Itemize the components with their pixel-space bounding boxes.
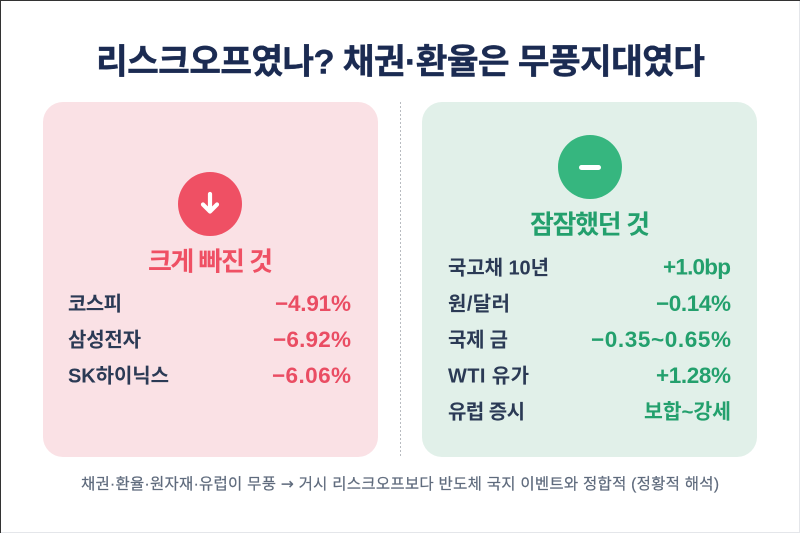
- row: European stocks: 유럽 증시: [448, 400, 525, 424]
- row: 10-year treasury: 국고채 10년: [448, 256, 549, 280]
- row: won/dollar: 원/달러: [448, 292, 510, 316]
- row: WTI: [448, 363, 731, 388]
- row: WTI: +1.28%: [656, 363, 731, 388]
- row: SK hynix: −6.06%: [272, 363, 351, 388]
- row: 10-year treasury: +1.0bp: [663, 254, 731, 280]
- row: gold: −0.35~0.65%: [591, 327, 731, 352]
- row: SK hynix: SK하이닉스: [68, 364, 169, 388]
- row: Samsung Electronics: 삼성전자: [68, 328, 141, 352]
- row: SK hynix: [68, 363, 351, 388]
- heading: stayed calm: 잠잠했던 것: [530, 210, 650, 240]
- row: won/dollar: −0.14%: [656, 291, 731, 316]
- icon: minus: [558, 135, 622, 199]
- footer note: 채권·환율·원자재·유럽이 무풍 → 거시 리스크오프보다 반도체 국지 이벤트와 정합적 (정황적 해석): [81, 475, 719, 493]
- panel: stayed calm: [422, 102, 757, 457]
- icon: down arrow: [178, 172, 242, 236]
- heading: large declines: 크게 빠진 것: [148, 246, 273, 276]
- row: Samsung Electronics: −6.92%: [273, 327, 351, 352]
- row: European stocks: 보합~강세: [644, 400, 731, 424]
- row: 10-year treasury: [448, 254, 731, 280]
- row: Samsung Electronics: [68, 327, 351, 352]
- row: KOSPI: [68, 291, 351, 316]
- row: KOSPI: 코스피: [68, 292, 122, 316]
- row: gold: 국제 금: [448, 328, 508, 352]
- row: WTI: WTI 유가: [448, 364, 529, 388]
- title: 리스크오프였나? 채권·환율은 무풍지대였다: [96, 44, 705, 82]
- row: European stocks: [448, 400, 731, 424]
- row: gold: [448, 327, 731, 352]
- row: KOSPI: −4.91%: [275, 291, 351, 316]
- row: won/dollar: [448, 291, 731, 316]
- panel: large declines: [43, 102, 378, 457]
